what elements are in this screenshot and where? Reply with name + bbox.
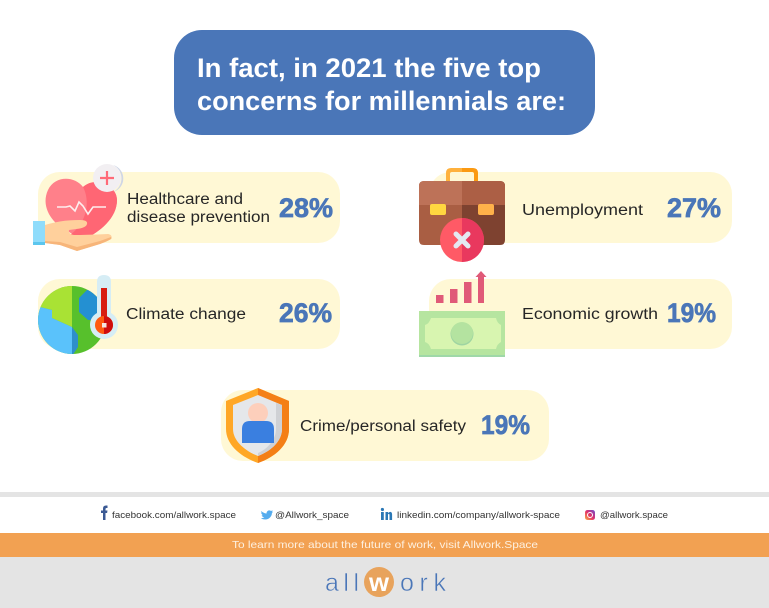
text: instagram: @allwork.space <box>600 510 668 521</box>
text: healthcare label: Healthcare and <box>127 191 243 208</box>
orange banner: To learn more about the future of work, visit Allwork.Space <box>232 539 538 551</box>
logo <box>325 567 446 597</box>
text: crime label: Crime/personal safety <box>300 418 466 435</box>
percentage: 26% <box>279 298 332 328</box>
panel: climate change <box>36 275 340 356</box>
icon: twitter <box>261 510 273 519</box>
divider bar <box>0 492 769 497</box>
text: healthcare label <box>127 191 270 226</box>
text: healthcare label: disease prevention <box>127 209 270 226</box>
panel: crime <box>221 388 549 463</box>
title <box>174 30 595 135</box>
title: concerns for millennials are: <box>197 86 566 116</box>
icon: instagram <box>585 510 595 520</box>
percentage: 27% <box>667 193 721 223</box>
panel: economic growth <box>419 271 732 357</box>
logo: all <box>325 569 359 597</box>
text: linkedin: linkedin.com/company/allwork-space <box>397 510 560 521</box>
percentage: 19% <box>667 298 716 328</box>
logo: w <box>368 567 390 597</box>
social links <box>101 506 668 521</box>
icon: facebook <box>101 506 108 520</box>
text: twitter: @Allwork_space <box>275 510 349 521</box>
percentage: 28% <box>279 193 333 223</box>
logo: ork <box>400 569 446 597</box>
title: In fact, in 2021 the five top <box>197 53 541 83</box>
icon: heart in hand <box>33 164 123 251</box>
icon: money and growth bars <box>419 271 505 357</box>
icon: shield with person <box>226 388 289 463</box>
panel: healthcare <box>33 164 340 251</box>
text: economic label: Economic growth <box>522 306 658 323</box>
footer logo band <box>0 557 769 608</box>
orange banner <box>0 533 769 557</box>
icon: linkedin <box>381 508 392 520</box>
icon: briefcase with cross <box>419 168 505 262</box>
text: unemployment label: Unemployment <box>522 202 644 219</box>
panel: unemployment <box>419 168 732 262</box>
text: facebook: facebook.com/allwork.space <box>112 510 236 521</box>
percentage: 19% <box>481 410 530 440</box>
text: climate label: Climate change <box>126 306 246 323</box>
icon: globe with thermometer <box>36 275 118 356</box>
